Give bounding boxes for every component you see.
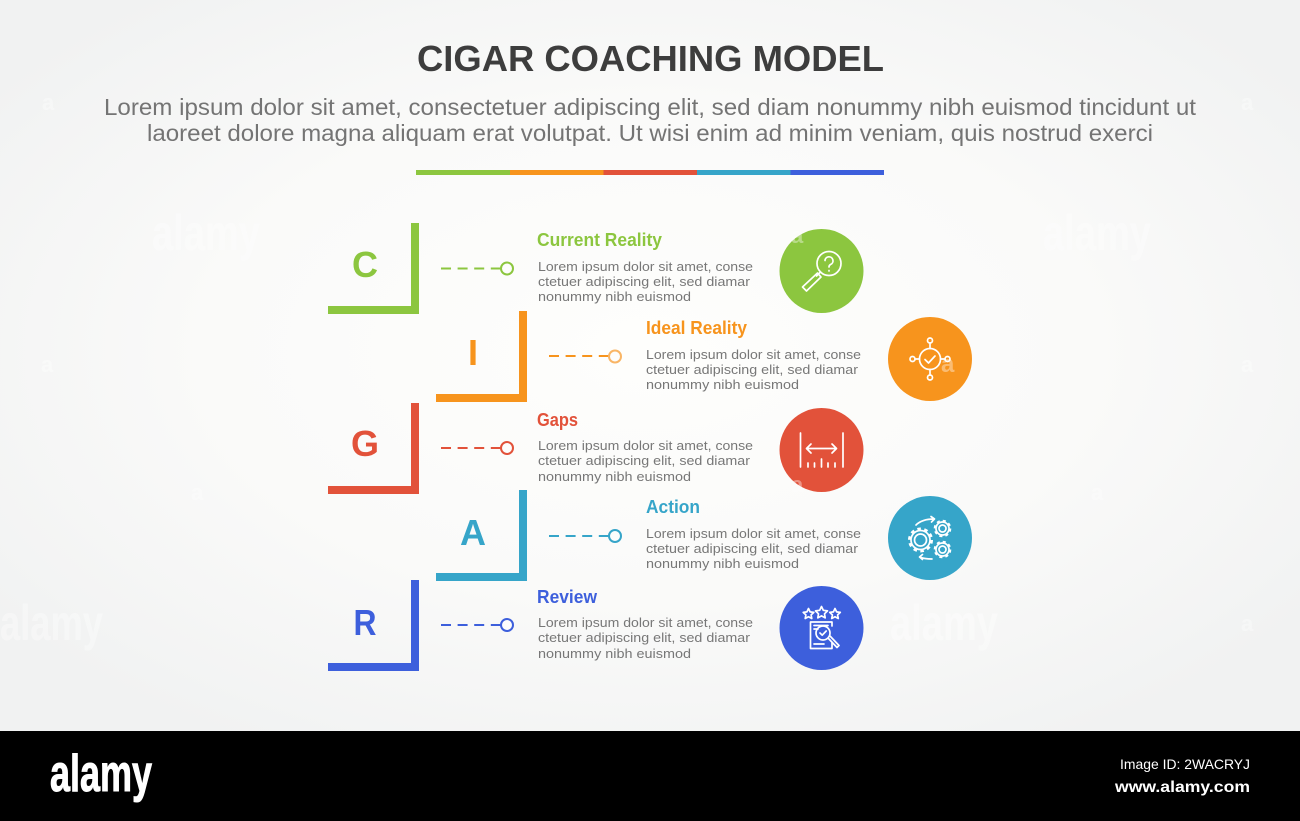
bracket C	[328, 223, 415, 310]
subtitle text: Lorem ipsum dolor sit amet, consectetuer adipiscing elit, sed diam nonummy nibh euismod tincidunt ut	[104, 94, 1197, 120]
bracket R	[328, 580, 415, 667]
subtitle text	[104, 94, 1197, 146]
watermarks: a	[1091, 480, 1104, 505]
heading Action: Action	[646, 497, 700, 517]
description A	[646, 527, 861, 571]
description R: ctetuer adipiscing elit, sed diamar	[538, 631, 750, 645]
description G	[538, 439, 753, 484]
heading Gaps: Gaps	[537, 410, 578, 430]
description I: ctetuer adipiscing elit, sed diamar	[646, 363, 858, 377]
description R: nonummy nibh euismod	[538, 647, 691, 661]
image id: Image ID: 2WACRYJ	[1120, 756, 1250, 772]
row: A Action	[436, 490, 972, 580]
letter C: C	[352, 244, 378, 285]
description A: Lorem ipsum dolor sit amet, conse	[646, 527, 861, 541]
watermarks: alamy	[890, 595, 998, 651]
watermarks: a	[1241, 611, 1254, 636]
description I	[646, 348, 861, 392]
watermarks	[0, 90, 1254, 651]
bracket A	[436, 490, 523, 577]
icon: measuring gap	[780, 408, 864, 492]
bracket I	[436, 311, 523, 398]
watermarks: a	[1241, 90, 1254, 115]
watermarks: a	[1241, 352, 1254, 377]
watermarks: a	[191, 480, 204, 505]
description R: Lorem ipsum dolor sit amet, conse	[538, 616, 753, 630]
watermarks: alamy	[0, 595, 103, 651]
connector I	[549, 350, 621, 362]
description I: Lorem ipsum dolor sit amet, conse	[646, 348, 861, 362]
multicolour divider	[416, 170, 884, 175]
connector C	[441, 262, 513, 274]
row: C Current Reality	[328, 223, 864, 313]
watermarks: a	[791, 223, 804, 248]
heading Current Reality: Current Reality	[537, 230, 662, 250]
letter G: G	[351, 423, 379, 464]
row: R Review	[328, 580, 864, 670]
watermarks: a	[41, 352, 54, 377]
footer bar	[0, 731, 1300, 821]
watermarks: alamy	[1043, 205, 1151, 261]
description R	[538, 616, 753, 661]
description C: ctetuer adipiscing elit, sed diamar	[538, 275, 750, 289]
watermarks: alamy	[152, 205, 260, 261]
letter R: R	[354, 602, 376, 643]
connector A	[549, 530, 621, 542]
description G: Lorem ipsum dolor sit amet, conse	[538, 439, 753, 453]
icon: target check network	[888, 317, 972, 401]
icon: magnifier question	[780, 229, 864, 313]
bracket G	[328, 403, 415, 490]
description A: ctetuer adipiscing elit, sed diamar	[646, 542, 858, 556]
description C: nonummy nibh euismod	[538, 290, 691, 304]
description I: nonummy nibh euismod	[646, 378, 799, 392]
title: CIGAR COACHING MODEL	[417, 38, 884, 79]
icon: stars report magnifier	[780, 586, 864, 670]
alamy logo: alamy	[50, 745, 152, 803]
letter I: I	[468, 332, 478, 373]
description C	[538, 260, 753, 304]
description G: nonummy nibh euismod	[538, 470, 691, 484]
connector R	[441, 619, 513, 631]
watermarks: a	[42, 90, 55, 115]
row: I Ideal Reality	[436, 311, 972, 401]
row: G Gaps	[328, 403, 864, 492]
description G: ctetuer adipiscing elit, sed diamar	[538, 454, 750, 468]
watermarks: a	[941, 351, 955, 378]
watermarks: a	[791, 472, 804, 497]
website: www.alamy.com	[1114, 779, 1250, 796]
description A: nonummy nibh euismod	[646, 557, 799, 571]
connector G	[441, 442, 513, 454]
heading Ideal Reality: Ideal Reality	[646, 318, 747, 338]
subtitle text: laoreet dolore magna aliquam erat volutpat. Ut wisi enim ad minim veniam, quis nostrud exerci	[147, 120, 1153, 146]
letter A: A	[460, 512, 486, 553]
description C: Lorem ipsum dolor sit amet, conse	[538, 260, 753, 274]
heading Review: Review	[537, 587, 598, 607]
icon: gears cycle	[888, 496, 972, 580]
